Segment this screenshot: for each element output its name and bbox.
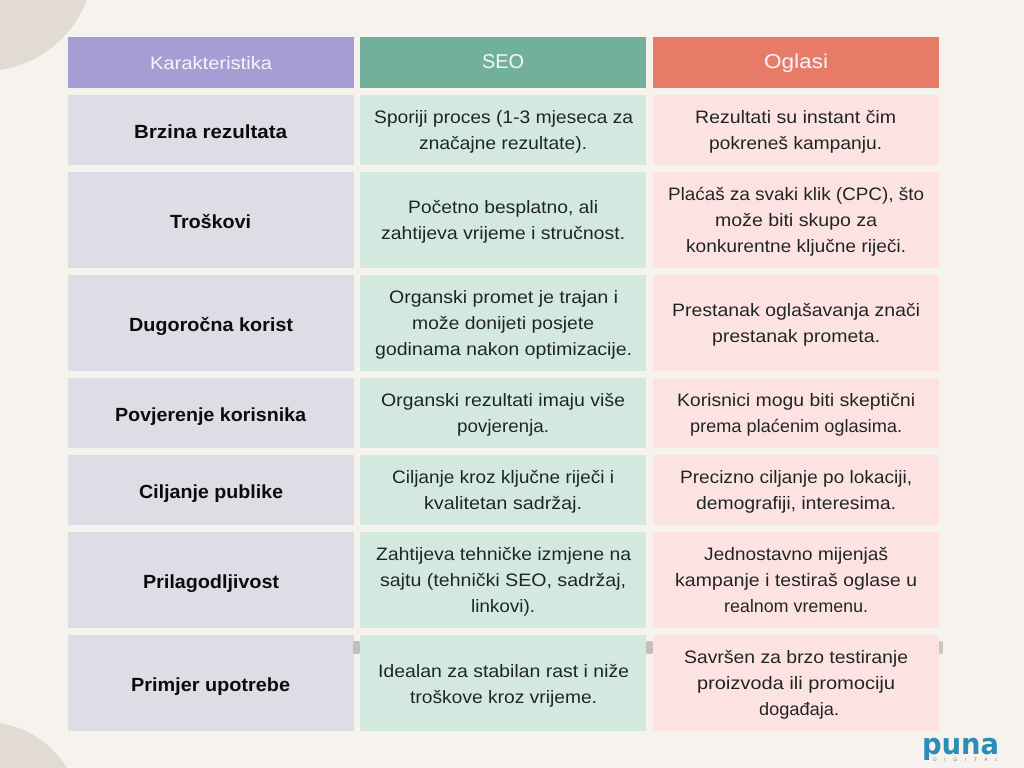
row: Brzina rezultata: značajne rezultate).: [419, 133, 587, 153]
row: Ciljanje publike: Ciljanje publike: [139, 482, 283, 503]
row: Prilagodljivost: sajtu (tehnički SEO, sadržaj,: [380, 570, 626, 590]
row: Dugoročna korist: može donijeti posjete: [412, 313, 594, 333]
row: Ciljanje publike: Ciljanje kroz ključne riječi i: [392, 467, 614, 487]
row: Prilagodljivost: Jednostavno mijenjaš: [704, 544, 888, 564]
row: Povjerenje korisnika: Organski rezultati imaju više: [381, 390, 625, 410]
row: Povjerenje korisnika: Povjerenje korisnika: [115, 405, 306, 426]
column header: SEO: [360, 37, 646, 88]
column header: Oglasi: Oglasi: [764, 51, 828, 73]
row: Dugoročna korist: Organski promet je trajan i: [389, 287, 618, 307]
row: Brzina rezultata: [68, 95, 939, 165]
row: Primjer upotrebe: troškove kroz vrijeme.: [410, 687, 597, 707]
decorative circle: bottom left: [0, 723, 67, 768]
logo: Puna Digital: puna: [922, 727, 999, 761]
row: Dugoročna korist: [68, 275, 939, 371]
row: Prilagodljivost: kampanje i testiraš oglase u: [675, 570, 917, 590]
row: Troškovi: [68, 172, 939, 268]
row: Povjerenje korisnika: Korisnici mogu biti skeptični: [677, 390, 915, 410]
row: Prilagodljivost: linkovi).: [471, 596, 535, 616]
row: Troškovi: konkurentne ključne riječi.: [686, 236, 906, 256]
row: Dugoročna korist: Prestanak oglašavanja znači: [672, 300, 920, 320]
row: Primjer upotrebe: Savršen za brzo testiranje: [684, 647, 908, 667]
column header: Oglasi: [653, 37, 939, 88]
row: Prilagodljivost: Prilagodljivost: [143, 572, 280, 593]
row: Primjer upotrebe: Idealan za stabilan rast i niže: [378, 661, 629, 681]
row: Dugoročna korist: prestanak prometa.: [712, 326, 880, 346]
row: Prilagodljivost: [68, 532, 939, 628]
row: Brzina rezultata: Sporiji proces (1-3 mjeseca za: [374, 107, 634, 127]
row: Povjerenje korisnika: [68, 378, 939, 448]
row: Brzina rezultata: Rezultati su instant čim: [695, 107, 896, 127]
decorative circle: top left: [0, 0, 87, 70]
row: Dugoročna korist: Dugoročna korist: [129, 315, 294, 336]
column header: SEO: SEO: [482, 51, 524, 73]
row: Dugoročna korist: godinama nakon optimizacije.: [375, 339, 632, 359]
row: Troškovi: zahtijeva vrijeme i stručnost.: [381, 223, 625, 243]
row: Ciljanje publike: kvalitetan sadržaj.: [424, 493, 582, 513]
column header: Karakteristika: [68, 37, 354, 88]
row: Prilagodljivost: Zahtijeva tehničke izmjene na: [376, 544, 632, 564]
row: Troškovi: Plaćaš za svaki klik (CPC), što: [668, 184, 924, 204]
row: Troškovi: Troškovi: [170, 212, 251, 233]
column header: Karakteristika: Karakteristika: [150, 53, 273, 73]
row: Primjer upotrebe: proizvoda ili promociju: [697, 673, 895, 693]
logo: Puna Digital: DIGITAL: [933, 757, 998, 763]
row: Povjerenje korisnika: prema plaćenim oglasima.: [690, 416, 902, 436]
row: Primjer upotrebe: [68, 635, 943, 731]
row: Prilagodljivost: realnom vremenu.: [724, 596, 868, 616]
row: Brzina rezultata: pokreneš kampanju.: [709, 133, 882, 153]
row: Ciljanje publike: [68, 455, 939, 525]
row: Ciljanje publike: demografiji, interesima.: [696, 493, 896, 513]
row: Primjer upotrebe: Primjer upotrebe: [131, 675, 290, 696]
row: Troškovi: može biti skupo za: [715, 210, 878, 230]
row: Troškovi: Početno besplatno, ali: [408, 197, 598, 217]
row: Brzina rezultata: Brzina rezultata: [134, 122, 287, 143]
row: Primjer upotrebe: događaja.: [759, 699, 839, 719]
row: Povjerenje korisnika: povjerenja.: [457, 416, 549, 436]
row: Ciljanje publike: Precizno ciljanje po lokaciji,: [680, 467, 912, 487]
